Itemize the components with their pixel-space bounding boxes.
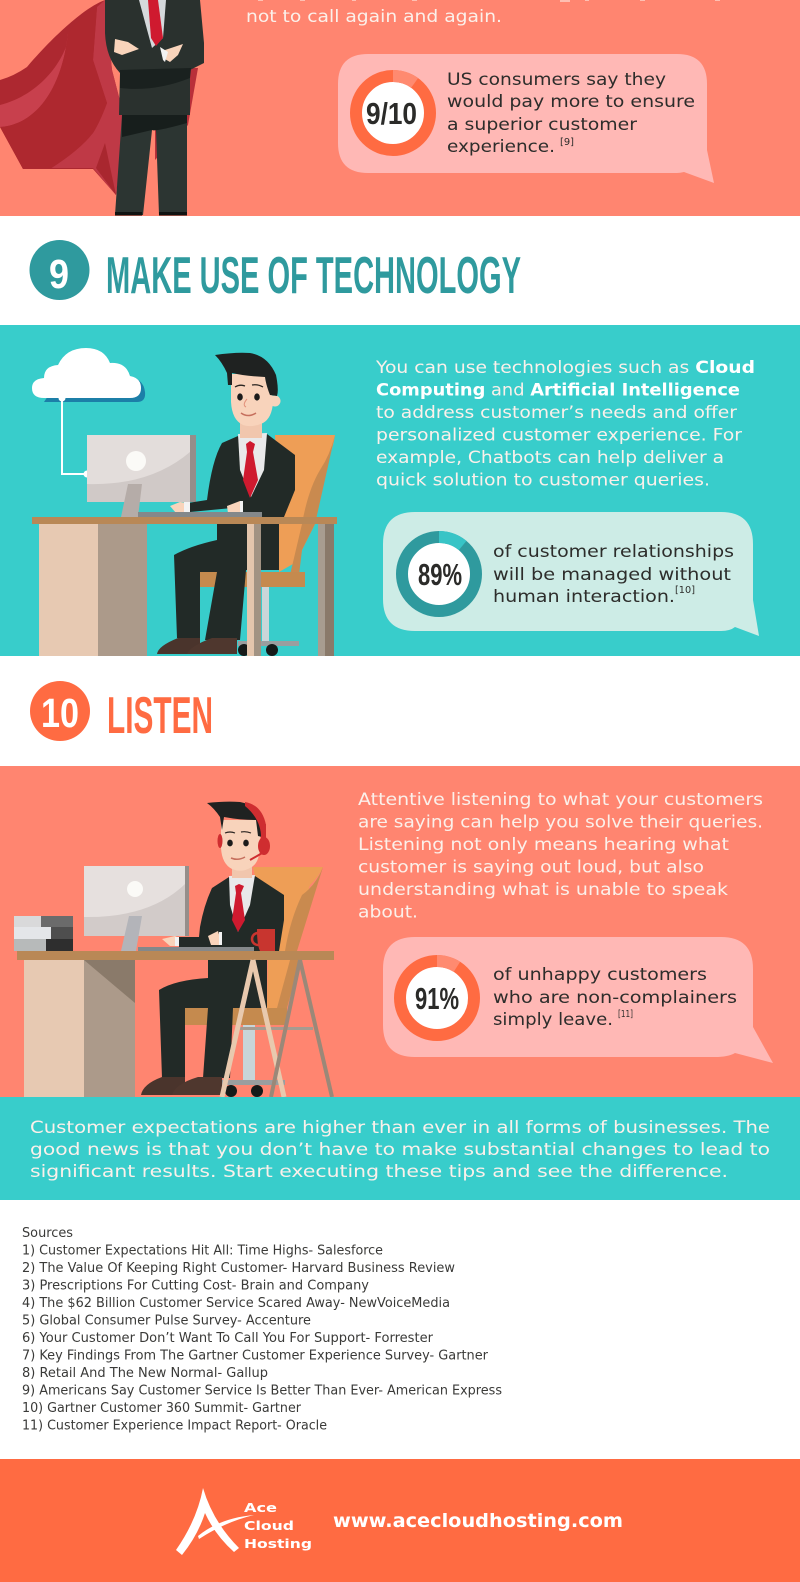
text: tip 9 body: example, Chatbots can help deliver a xyxy=(376,448,724,468)
panel: tip 10 listen xyxy=(0,766,800,1097)
icon: superhero businessman with cape xyxy=(0,0,204,216)
panel: tip 9 technology xyxy=(0,325,800,656)
logo: Ace Cloud Hosting: Ace xyxy=(244,1500,277,1515)
text: tip 9 body: Computing and Artificial Intelligence xyxy=(376,380,740,400)
text: sources list: 7) Key Findings From The Gartner Customer Experience Survey- Gartner xyxy=(22,1348,489,1364)
callout: 91% speech bubble: simply leave. xyxy=(493,1010,613,1030)
text: sources list: 5) Global Consumer Pulse Survey- Accenture xyxy=(22,1314,311,1328)
callout: 89% speech bubble: 89% xyxy=(418,557,462,592)
callout: 91% speech bubble: of unhappy customers xyxy=(493,965,707,985)
callout: 89% speech bubble: of customer relationships xyxy=(493,542,734,562)
logo: Ace Cloud Hosting: Cloud xyxy=(244,1518,294,1533)
panel: tip 8 continuation xyxy=(0,0,800,216)
callout: 9/10 speech bubble: 9/10 xyxy=(366,96,417,131)
heading: tip 10 xyxy=(30,681,213,744)
text: tip 10 body: understanding what is unable to speak xyxy=(358,880,728,900)
text: tip 10 body: are saying can help you solve their queries. xyxy=(358,812,763,832)
text: tip 9 body: personalized customer experience. For xyxy=(376,426,742,446)
text: sources list: 10) Gartner Customer 360 Summit- Gartner xyxy=(22,1401,302,1416)
text: sources list: 1) Customer Expectations Hit All: Time Highs- Salesforce xyxy=(22,1244,383,1258)
callout: 89% speech bubble: [10] xyxy=(675,585,695,596)
panel: conclusion: good news is that you don’t have to make substantial changes to lead to xyxy=(30,1140,770,1160)
heading: tip 10: LISTEN xyxy=(107,686,213,744)
callout: 89% speech bubble: human interaction. xyxy=(493,587,675,607)
callout: 89% speech bubble xyxy=(383,512,759,636)
heading: tip 9 xyxy=(30,240,521,304)
panel: conclusion: Customer expectations are higher than ever in all forms of businesses. The xyxy=(30,1118,770,1138)
text: tip 9 body: You can use technologies such as Cloud xyxy=(375,358,755,378)
heading: tip 9: 9 xyxy=(49,251,69,297)
text: sources list: Sources xyxy=(22,1226,73,1241)
text: sources list: 11) Customer Experience Impact Report- Oracle xyxy=(22,1418,327,1434)
text: sources list: 8) Retail And The New Normal- Gallup xyxy=(22,1366,268,1381)
callout: 9/10 speech bubble xyxy=(338,54,714,183)
text: sources list: 2) The Value Of Keeping Right Customer- Harvard Business Review xyxy=(22,1261,455,1276)
callout: 9/10 speech bubble: a superior customer xyxy=(447,115,637,135)
text: website URL: www.acecloudhosting.com xyxy=(333,1510,623,1532)
text: tip 10 body: customer is saying out loud, but also xyxy=(358,858,704,878)
text: tip 10 body xyxy=(358,790,763,922)
callout: 91% speech bubble: 91% xyxy=(415,981,459,1016)
callout: 91% speech bubble xyxy=(383,937,773,1063)
callout: 9/10 speech bubble: US consumers say they xyxy=(447,70,666,90)
text: sources list: 3) Prescriptions For Cutting Cost- Brain and Company xyxy=(22,1278,369,1294)
callout: 9/10 speech bubble: would pay more to ensure xyxy=(447,92,695,112)
text: closing line of tip 8: not to call again and again. xyxy=(246,7,502,27)
text: tip 10 body: about. xyxy=(358,902,418,922)
callout: 9/10 speech bubble: [9] xyxy=(560,137,574,148)
panel: conclusion: significant results. Start executing these tips and see the difference. xyxy=(30,1162,728,1182)
callout: 89% speech bubble: will be managed without xyxy=(493,565,731,585)
panel: footer xyxy=(0,1459,800,1582)
heading: tip 10: 10 xyxy=(41,690,79,736)
text: tip 9 body: quick solution to customer queries. xyxy=(376,470,710,490)
callout: 91% speech bubble: who are non-complainers xyxy=(493,988,737,1008)
text: tip 9 body: to address customer’s needs and offer xyxy=(376,403,737,423)
text: sources list xyxy=(22,1226,502,1434)
illustration: man with headset at desk xyxy=(14,802,334,1097)
text: tip 9 body xyxy=(375,358,755,490)
text: sources list: 4) The $62 Billion Customer Service Scared Away- NewVoiceMedia xyxy=(22,1296,450,1311)
text: sources list: 9) Americans Say Customer Service Is Better Than Ever- American Express xyxy=(22,1384,502,1398)
text: tip 10 body: Attentive listening to what your customers xyxy=(358,790,763,810)
logo: Ace Cloud Hosting: Hosting xyxy=(244,1536,312,1551)
callout: 9/10 speech bubble: experience. xyxy=(447,137,555,157)
icon: cloud connected to computer xyxy=(32,348,145,478)
illustration: man at desk with computer xyxy=(32,353,337,656)
callout: 91% speech bubble: [11] xyxy=(618,1009,633,1020)
text: tip 10 body: Listening not only means hearing what xyxy=(358,835,729,855)
panel: conclusion xyxy=(0,1097,800,1200)
text: sources list: 6) Your Customer Don’t Want To Call You For Support- Forrester xyxy=(22,1331,434,1346)
logo: Ace Cloud Hosting xyxy=(176,1488,312,1555)
